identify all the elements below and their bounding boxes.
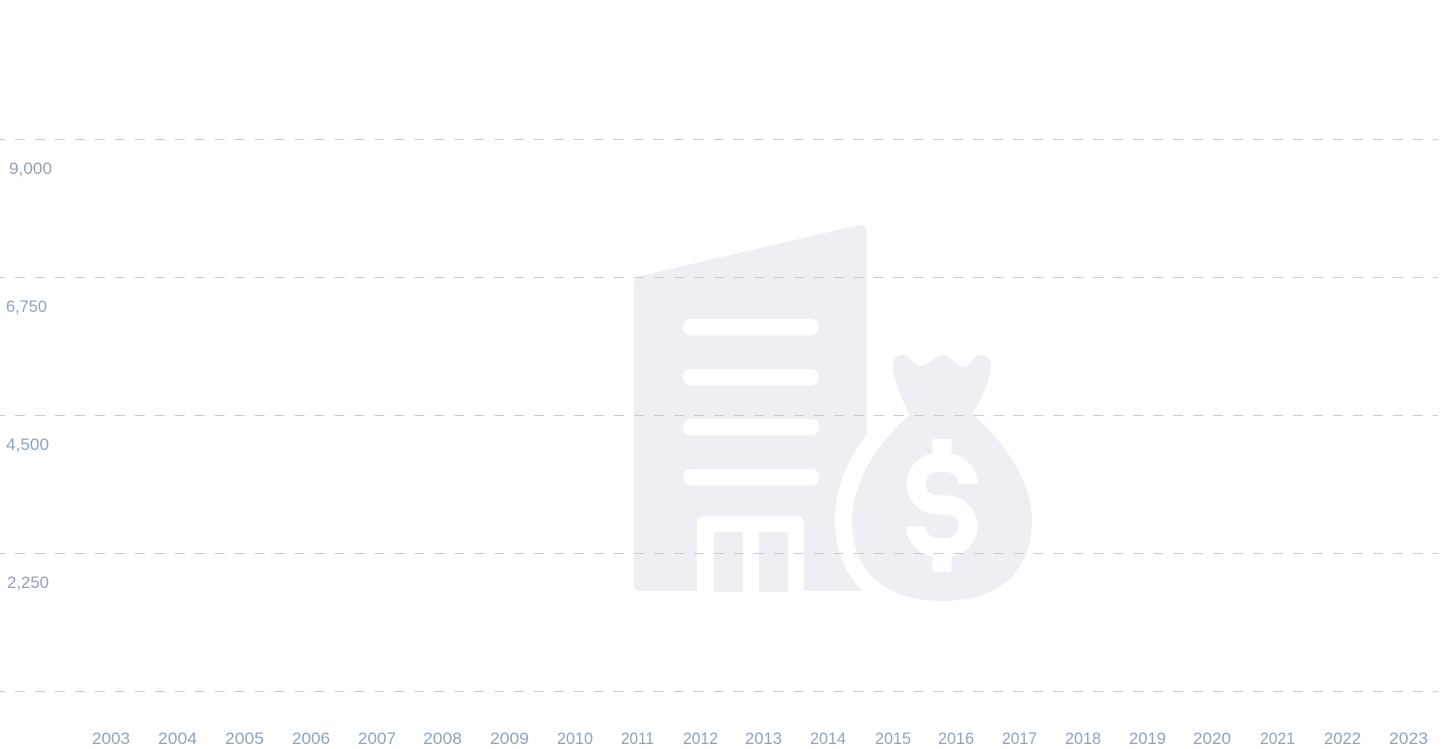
x-axis labels: 2020: [1193, 730, 1231, 748]
x-axis labels: 2008: [423, 730, 462, 748]
x-axis labels: 2004: [158, 730, 197, 748]
y-axis labels: [6, 160, 52, 592]
x-axis labels: 2014: [810, 730, 846, 748]
x-axis labels: 2007: [358, 730, 396, 748]
icon: building with money bag watermark: [634, 225, 1032, 601]
x-axis labels: 2013: [745, 730, 782, 748]
x-axis labels: [92, 730, 1428, 748]
icon: money bag: [852, 355, 1032, 601]
x-axis labels: 2019: [1129, 730, 1166, 748]
x-axis labels: 2018: [1065, 730, 1101, 748]
x-axis labels: 2010: [557, 730, 593, 748]
x-axis labels: 2017: [1002, 730, 1037, 748]
y-axis labels: 6,750: [6, 298, 47, 316]
icon: building: [634, 225, 867, 593]
x-axis labels: 2003: [92, 730, 130, 748]
x-axis labels: 2011: [621, 730, 654, 748]
y-axis labels: 4,500: [6, 436, 49, 454]
x-axis labels: 2023: [1389, 730, 1428, 748]
y-axis labels: 2,250: [7, 574, 49, 592]
x-axis labels: 2005: [225, 730, 264, 748]
y-axis labels: 9,000: [9, 160, 52, 178]
x-axis labels: 2006: [292, 730, 330, 748]
x-axis labels: 2012: [683, 730, 718, 748]
x-axis labels: 2015: [875, 730, 911, 748]
x-axis labels: 2009: [490, 730, 529, 748]
x-axis labels: 2016: [938, 730, 974, 748]
x-axis labels: 2021: [1260, 730, 1295, 748]
x-axis labels: 2022: [1324, 730, 1361, 748]
